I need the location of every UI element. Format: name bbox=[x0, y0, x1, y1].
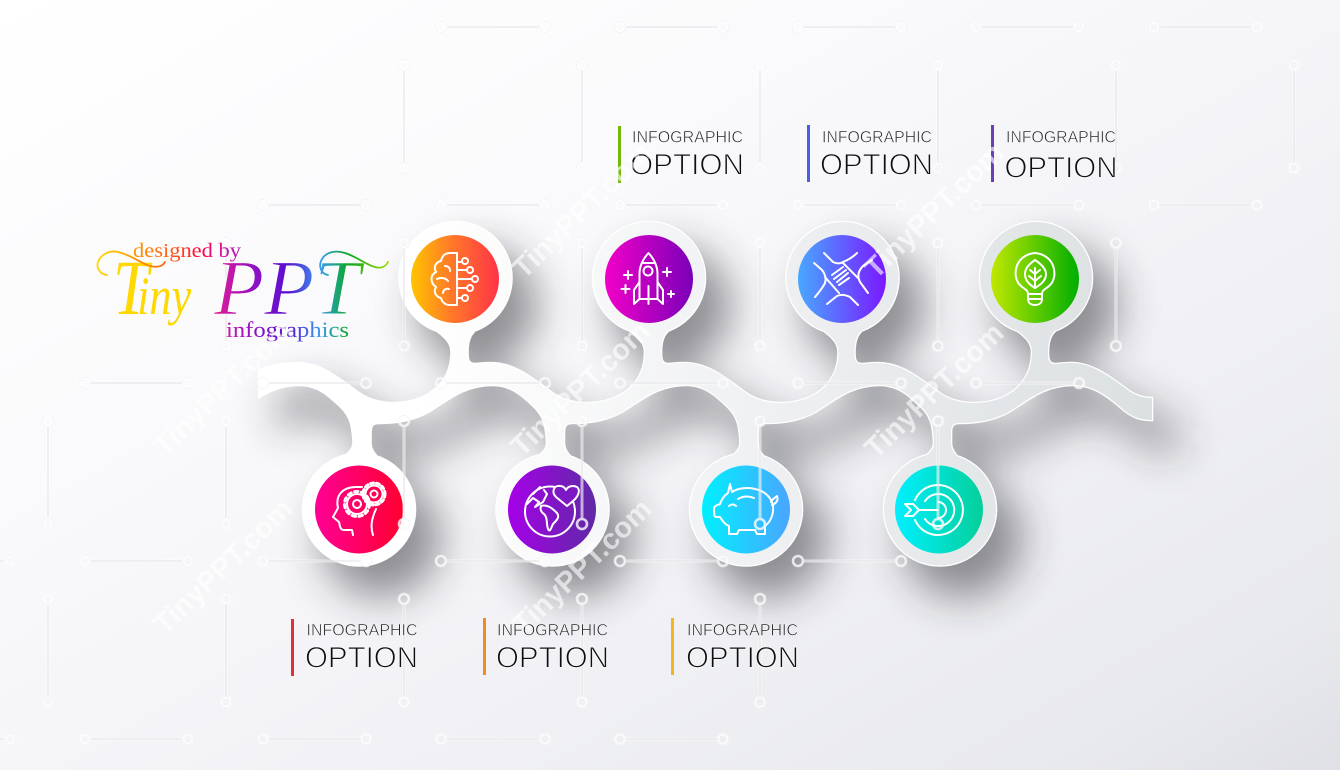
label: orange option bbox=[483, 618, 609, 675]
node: rocket bbox=[605, 235, 693, 323]
logo: designed by TinyPPT infographics: Tiny bbox=[113, 245, 191, 331]
node: brain bbox=[411, 235, 499, 323]
label: green option: OPTION bbox=[630, 148, 744, 182]
watermarks bbox=[148, 137, 1010, 641]
label: blue option: INFOGRAPHIC bbox=[822, 128, 932, 146]
watermarks: TinyPPT.com bbox=[507, 137, 658, 285]
label: red option bbox=[291, 619, 418, 676]
label: blue option: OPTION bbox=[820, 148, 933, 182]
label: green option bbox=[618, 126, 744, 183]
label: green option: INFOGRAPHIC bbox=[632, 128, 743, 146]
label: yellow option: OPTION bbox=[686, 642, 799, 674]
node: target with arrow bbox=[895, 466, 983, 554]
label: blue option bbox=[807, 125, 933, 182]
node: piggy bank bbox=[702, 466, 790, 554]
node: globe with heart bbox=[508, 466, 596, 554]
watermarks: TinyPPT.com bbox=[507, 493, 658, 641]
node: joined hands bbox=[798, 235, 886, 323]
node: light bulb with leaf bbox=[991, 235, 1079, 323]
label: yellow option: INFOGRAPHIC bbox=[687, 620, 798, 640]
label: orange option: INFOGRAPHIC bbox=[497, 620, 608, 640]
label: yellow option bbox=[671, 618, 799, 675]
label: red option: OPTION bbox=[305, 642, 418, 674]
label: red option: INFOGRAPHIC bbox=[306, 620, 418, 640]
watermarks: TinyPPT.com bbox=[148, 315, 299, 463]
watermarks: TinyPPT.com bbox=[148, 493, 299, 641]
watermarks: TinyPPT.com bbox=[859, 137, 1010, 285]
logo: designed by TinyPPT infographics: designed by bbox=[133, 240, 241, 262]
wavy ribbon timeline with eight ring nodes bbox=[259, 222, 1152, 566]
label: purple option: INFOGRAPHIC bbox=[1006, 128, 1116, 146]
logo: designed by TinyPPT infographics bbox=[97, 240, 388, 342]
node: head with gears bbox=[315, 466, 403, 554]
logo: designed by TinyPPT infographics: PPT bbox=[213, 244, 365, 331]
logo: designed by TinyPPT infographics: infographics bbox=[226, 317, 349, 342]
watermarks: TinyPPT.com bbox=[505, 315, 656, 463]
ribbon drop shadow bbox=[281, 250, 1174, 594]
label: orange option: OPTION bbox=[496, 642, 609, 674]
label: purple option bbox=[991, 125, 1118, 184]
label: purple option: OPTION bbox=[1004, 152, 1118, 184]
watermarks: TinyPPT.com bbox=[859, 317, 1010, 465]
